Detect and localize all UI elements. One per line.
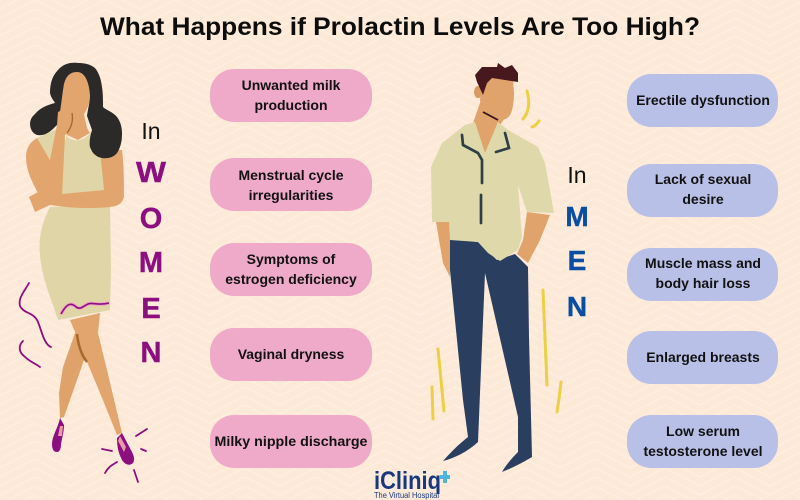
panel: women symptoms bbox=[210, 69, 372, 468]
panel: men symptoms bbox=[627, 74, 778, 468]
pill: menstrual cycle irregularities: Menstrual cycle bbox=[238, 167, 344, 183]
label: In Women: N bbox=[141, 337, 161, 369]
label: In Men bbox=[565, 162, 589, 322]
label: In Men: N bbox=[567, 291, 587, 322]
pill: milky nipple discharge: Milky nipple discharge bbox=[214, 433, 368, 449]
man chin line bbox=[483, 112, 498, 120]
woman front leg bbox=[70, 313, 122, 435]
woman head and neck bbox=[60, 72, 90, 140]
woman upper dress bbox=[37, 129, 105, 197]
pill: enlarged breasts bbox=[627, 331, 778, 384]
pill: unwanted milk production: production bbox=[254, 97, 328, 113]
pill: unwanted milk production bbox=[210, 69, 372, 122]
woman right arm bbox=[29, 150, 124, 212]
man ear bbox=[474, 86, 482, 98]
man trousers bbox=[443, 239, 532, 472]
label: In Men: E bbox=[568, 245, 586, 276]
woman motion lines bbox=[20, 283, 147, 482]
logo: iCliniq: The Virtual Hospital bbox=[374, 491, 439, 500]
label: In Women bbox=[136, 118, 167, 369]
illustration: woman bbox=[20, 63, 147, 482]
pill: erectile dysfunction: Erectile dysfunction bbox=[636, 92, 770, 108]
woman left shoe bbox=[52, 418, 64, 452]
logo cross bbox=[440, 471, 450, 483]
woman right shoe bbox=[117, 433, 134, 465]
pill: low serum testosterone level: Low serum bbox=[666, 423, 740, 439]
woman upper dress collar bbox=[66, 130, 96, 150]
pill: muscle mass and body hair loss: Muscle mass and bbox=[645, 255, 761, 271]
logo: iCliniq: iCliniq bbox=[374, 467, 441, 495]
pill: low serum testosterone level: testosterone level bbox=[643, 443, 763, 459]
woman hair bbox=[30, 63, 122, 158]
pill: menstrual cycle irregularities bbox=[210, 158, 372, 211]
label: In Women: W bbox=[136, 157, 167, 189]
man head bbox=[480, 76, 514, 120]
man shirt bbox=[431, 122, 554, 261]
label: In Women: O bbox=[140, 203, 162, 235]
woman skirt squiggle bbox=[61, 303, 109, 314]
man right forearm bbox=[517, 212, 550, 263]
man collar and placket bbox=[462, 133, 509, 223]
woman lower dress bbox=[39, 205, 111, 320]
pill: muscle mass and body hair loss bbox=[627, 248, 778, 301]
man motion lines bbox=[432, 91, 561, 419]
illustration: man bbox=[431, 63, 561, 472]
man hair bbox=[475, 63, 518, 95]
label: In Men: In bbox=[567, 162, 587, 188]
pill: symptoms of estrogen deficiency: estrogen deficiency bbox=[225, 271, 357, 287]
pill: erectile dysfunction bbox=[627, 74, 778, 127]
pill: symptoms of estrogen deficiency: Symptoms of bbox=[247, 251, 336, 267]
label: In Women: In bbox=[141, 118, 161, 144]
pill: muscle mass and body hair loss: body hair loss bbox=[656, 275, 751, 291]
pill: menstrual cycle irregularities: irregularities bbox=[249, 187, 334, 203]
pill: vaginal dryness bbox=[210, 328, 372, 381]
label: In Women: M bbox=[139, 247, 163, 279]
pill: lack of sexual desire: desire bbox=[682, 191, 724, 207]
pill: vaginal dryness: Vaginal dryness bbox=[238, 346, 345, 362]
label: In Women: E bbox=[141, 293, 161, 325]
pill: unwanted milk production: Unwanted milk bbox=[242, 77, 341, 93]
pill: symptoms of estrogen deficiency bbox=[210, 243, 372, 296]
pill: lack of sexual desire bbox=[627, 164, 778, 217]
pill: milky nipple discharge bbox=[210, 415, 372, 468]
pill: enlarged breasts: Enlarged breasts bbox=[646, 349, 760, 365]
woman raised arm and hand bbox=[26, 110, 73, 200]
pill: lack of sexual desire: Lack of sexual bbox=[655, 171, 751, 187]
pill: low serum testosterone level bbox=[627, 415, 778, 468]
woman finger bbox=[67, 113, 72, 133]
woman back leg bbox=[59, 333, 90, 418]
man left forearm bbox=[436, 222, 450, 277]
man neck bbox=[473, 100, 505, 153]
title: What Happens if Prolactin Levels Are Too High? bbox=[100, 13, 700, 41]
label: In Men: M bbox=[565, 201, 589, 232]
